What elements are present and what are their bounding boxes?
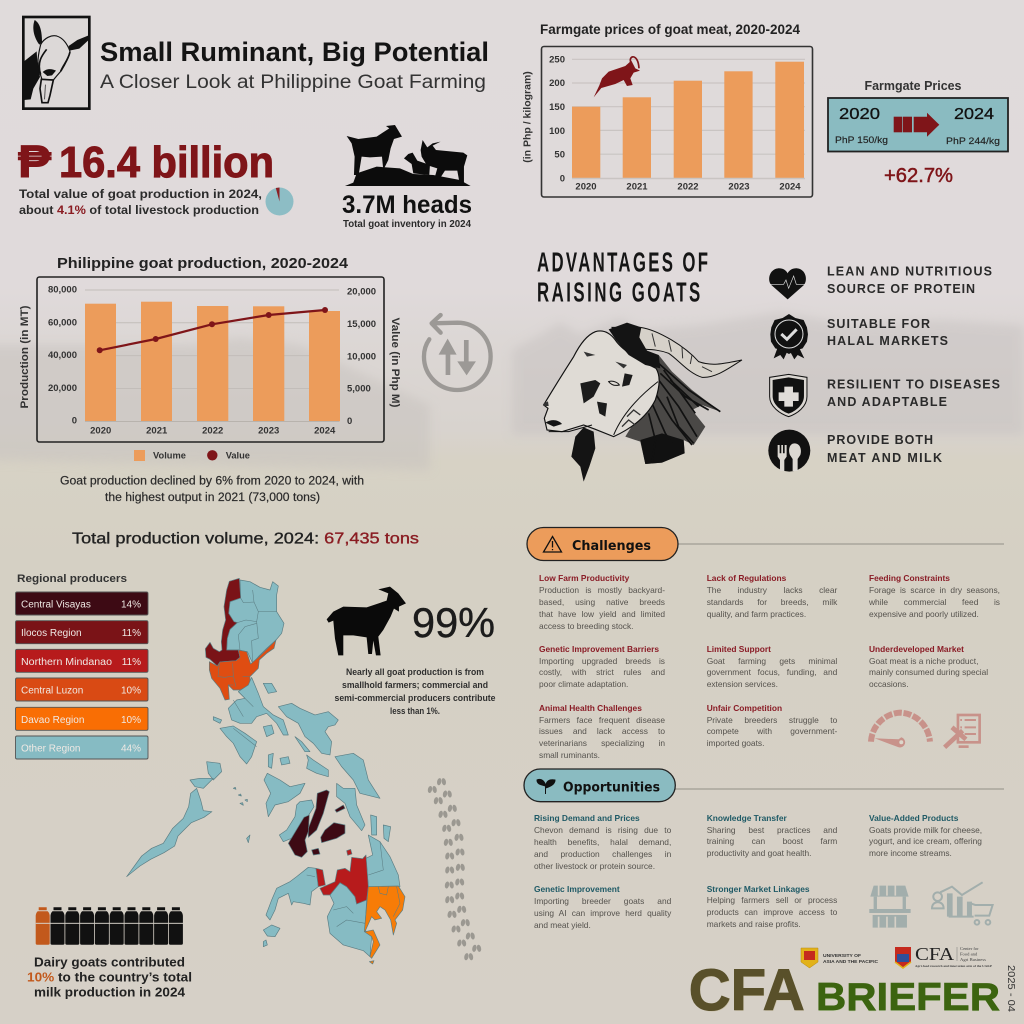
text: Lack of Regulations: [706, 573, 838, 619]
pie: 4.1 percent share: [266, 188, 294, 216]
combo chart: goat production volume and value: 2022: [202, 426, 223, 436]
axis title: production: Production (in MT): [19, 305, 31, 409]
legend: volume and value: Value: [226, 450, 250, 460]
bar chart: farmgate prices: 250: [549, 54, 565, 66]
text: Lack of Regulations: quality, and farm practices.: [707, 609, 806, 619]
icon: goat herd silhouette: [345, 125, 471, 186]
text: meat and milk: PROVIDE BOTH: [827, 433, 933, 447]
legend: regional shares: 44%: [121, 744, 141, 754]
text: Genetic Improvement Barriers: [539, 644, 665, 689]
icon: halal badge with check: [770, 314, 808, 359]
icon: cycle with up and down arrows: [424, 315, 491, 390]
text: smallholder description: [334, 667, 496, 716]
text: dairy goats contribution: 10% to the country’s total: [27, 971, 192, 985]
text: Genetic Improvement: Genetic Improvement: [534, 884, 620, 894]
text: Genetic Improvement Barriers: costly, with strict rules and: [539, 667, 665, 677]
panel: price comparison: PhP 150/kg: [835, 135, 888, 146]
text: Rising Demand and Prices: and production challenges in: [534, 849, 671, 859]
text: Animal Health Challenges: issues and lack access to: [539, 726, 665, 736]
icon: fork and spoon plate: [768, 430, 810, 472]
text: Limited Support: Goat farming gets minimal: [707, 656, 837, 666]
text: Animal Health Challenges: Farmers face frequent disease: [539, 715, 665, 725]
legend: volume and value: Volume: [153, 450, 186, 460]
combo chart: goat production volume and value: [37, 277, 384, 442]
label: inventory caption: Total goat inventory in 2024: [343, 218, 471, 230]
text: Genetic Improvement: Importing breeder goats and: [534, 896, 671, 906]
text: Knowledge Transfer: Sharing best practices and: [707, 825, 837, 835]
text: resilient and adaptable: [827, 378, 1000, 409]
map: Palawan: [127, 778, 250, 877]
icon: shield with cross: [770, 374, 807, 417]
combo chart: goat production volume and value: 40,000: [48, 350, 77, 361]
bar chart: farmgate prices: 2023: [728, 182, 750, 192]
subtitle: A Closer Look at Philippine Goat Farming: [100, 72, 486, 93]
icon: gauge at low level: [871, 713, 930, 747]
text: Rising Demand and Prices: Rising Demand and Prices: [534, 813, 640, 823]
legend: regional shares: Davao Region: [21, 715, 84, 726]
legend: regional shares: 14%: [121, 600, 141, 610]
legend: regional shares: 10%: [121, 686, 141, 696]
logo: University of Asia and the Pacific: ASIA AND THE PACIFIC: [823, 959, 879, 965]
logo: Center for Food and Agri Business: Agri-food research and innovation arm of the UA&P: [915, 964, 993, 968]
wordmark: CFA Briefer: CFA: [689, 958, 805, 1023]
text: Feeding Constraints: while commercial feed is: [869, 597, 1000, 607]
text: Low Farm Productivity: access to breeding stock.: [539, 621, 634, 631]
text: Genetic Improvement: and meat yield.: [534, 920, 591, 930]
text: lean and nutritious: [827, 264, 992, 296]
text: Low Farm Productivity: based, using native breeds: [539, 597, 665, 607]
icon: leaping ibex: [594, 57, 640, 97]
text: value description: about 4.1% of total livestock production: [19, 203, 259, 217]
combo chart: goat production volume and value: 20,000: [48, 383, 77, 394]
text: suitable for halal markets: SUITABLE FOR: [827, 317, 930, 331]
text: Knowledge Transfer: training can boost farm: [707, 836, 837, 846]
text: Stronger Market Linkages: Stronger Market Linkages: [707, 884, 810, 894]
combo chart: goat production volume and value: 2024: [314, 426, 336, 436]
bar chart: farmgate prices: 200: [549, 78, 565, 89]
bar chart: farmgate prices: 2024: [779, 182, 801, 192]
bar chart: farmgate prices: 100: [549, 126, 565, 137]
text: production note: the highest output in 2021 (73,000 tons): [105, 492, 320, 504]
bar chart: farmgate prices: [542, 46, 812, 197]
text: Lack of Regulations: standards for breeds, milk: [707, 597, 837, 607]
combo chart: goat production volume and value: 15,000: [347, 319, 376, 330]
stat: price increase: +62.7%: [884, 165, 953, 187]
text: Low Farm Productivity: Low Farm Productivity: [539, 573, 629, 583]
text: value description: Total value of goat production in 2024,: [19, 187, 262, 201]
text: Value-Added Products: yogurt, and ice cream, offering: [869, 836, 982, 846]
text: Low Farm Productivity: Production is mostly backyard-: [539, 585, 665, 595]
text: Rising Demand and Prices: Chevon demand is rising due to: [534, 825, 671, 835]
label: issue number: 2025 - 04: [1005, 965, 1017, 1012]
text: meat and milk: [827, 433, 942, 465]
text: resilient and adaptable: RESILIENT TO DISEASES: [827, 378, 1000, 392]
legend: regional shares: 10%: [121, 715, 141, 726]
text: Rising Demand and Prices: [534, 813, 671, 871]
text: Unfair Competition: compete with government-: [707, 726, 837, 736]
map: Luzon: [205, 578, 284, 700]
wordmark: CFA Briefer: [689, 958, 1000, 1024]
illustration: goat head with horn: [544, 323, 742, 482]
chart title: goat production: Philippine goat production, 2020-2024: [57, 255, 349, 272]
legend: regional shares: 11%: [122, 628, 141, 639]
bar chart: farmgate prices: 0: [560, 174, 565, 184]
map: southern Luzon, Visayas north: [207, 677, 380, 798]
text: Animal Health Challenges: veterinarians specializing in: [539, 738, 665, 748]
text: smallholder description: semi-commercial producers contribute: [334, 693, 496, 703]
text: Genetic Improvement: [534, 884, 672, 930]
heading: advantages: ADVANTAGES OF: [537, 246, 708, 278]
icon: gavel and clipboard: [945, 715, 980, 747]
icon: sales chart and cart: [932, 882, 993, 925]
legend: regional shares: [16, 592, 148, 759]
logo: University of Asia and the Pacific: UNIVERSITY OF: [823, 953, 861, 959]
heading: advantages: [537, 246, 708, 308]
title: Small Ruminant, Big Potential: [100, 37, 489, 67]
text: Feeding Constraints: Feeding Constraints: [869, 573, 950, 583]
combo chart: goat production volume and value: 60,000: [48, 318, 77, 328]
text: smallholder description: Nearly all goat production is from: [346, 667, 484, 677]
legend: regional shares: Northern Mindanao: [21, 657, 112, 668]
logo: Center for Food and Agri Business: CFA: [915, 944, 954, 964]
text: Underdeveloped Market: Underdeveloped Market: [869, 644, 964, 654]
text: Value-Added Products: Value-Added Products: [869, 813, 958, 823]
logo: Center for Food and Agri Business: Agri Business: [960, 957, 986, 962]
icon: milk bottles, one of ten highlighted: [36, 907, 183, 945]
text: Animal Health Challenges: [539, 703, 665, 760]
text: Feeding Constraints: Forage is scarce in dry seasons,: [869, 585, 1000, 595]
stat: production value: ₱: [18, 136, 52, 187]
panel: price comparison: PhP 244/kg: [946, 136, 1000, 147]
heading: farmgate prices: Farmgate Prices: [864, 79, 962, 93]
logo: goat head in frame: [23, 17, 89, 109]
panel: price comparison: [828, 98, 1008, 152]
heading: advantages: RAISING GOATS: [537, 276, 700, 308]
text: Underdeveloped Market: mainly consumed during special: [869, 667, 988, 677]
text: suitable for halal markets: HALAL MARKETS: [827, 334, 948, 348]
heading pill: opportunities: [524, 769, 1004, 802]
logo: Center for Food and Agri Business: [895, 944, 993, 968]
text: Low Farm Productivity: [539, 573, 665, 631]
bar chart: farmgate prices: 2021: [626, 182, 648, 192]
text: Unfair Competition: Private breeders struggle to: [707, 715, 837, 725]
text: Underdeveloped Market: Goat meat is a niche product,: [869, 656, 978, 666]
combo chart: goat production volume and value: 20,000: [347, 286, 376, 298]
text: value description: [19, 187, 262, 217]
text: Animal Health Challenges: small ruminants.: [539, 750, 600, 760]
combo chart: goat production volume and value: 10,000: [347, 352, 376, 362]
text: Feeding Constraints: [869, 573, 1000, 619]
text: Knowledge Transfer: [706, 813, 837, 858]
combo chart: goat production volume and value: 2021: [146, 426, 168, 436]
icon: standing goat silhouette: [327, 587, 406, 655]
combo chart: goat production volume and value: 5,000: [347, 384, 371, 394]
wordmark: CFA Briefer: BRIEFER: [816, 976, 1000, 1019]
text: Low Farm Productivity: that have low yield and limited: [539, 609, 665, 619]
heading: total production volume: Total production volume, 2024: 67,435 tons: [72, 530, 419, 548]
axis title: price unit: (in Php / kilogram): [522, 71, 534, 163]
text: Lack of Regulations: The industry lacks clear: [707, 585, 837, 595]
text: dairy goats contribution: Dairy goats contributed: [34, 956, 185, 970]
text: smallholder description: smallhold farmers; commercial and: [342, 680, 488, 690]
combo chart: goat production volume and value: 0: [347, 416, 352, 427]
bar chart: farmgate prices: 2020: [575, 182, 597, 192]
text: Limited Support: extension services.: [707, 679, 778, 689]
text: Genetic Improvement Barriers: poor climate adaptation.: [539, 679, 628, 689]
icon: goat hoof print trail: [427, 778, 482, 961]
text: Stronger Market Linkages: [707, 884, 837, 929]
text: dairy goats contribution: milk production in 2024: [34, 986, 185, 1000]
heading pill: opportunities: Opportunities: [563, 781, 660, 796]
text: Animal Health Challenges: Animal Health Challenges: [539, 703, 642, 713]
stat: production value: 16.4 billion: [59, 138, 274, 187]
heading: regional producers: Regional producers: [17, 573, 127, 585]
logo: Center for Food and Agri Business: Center for: [960, 946, 979, 951]
text: Knowledge Transfer: productivity and goat health.: [707, 848, 811, 858]
icon: market stall: [869, 885, 911, 928]
text: Stronger Market Linkages: products can improve access to: [707, 907, 837, 917]
text: Unfair Competition: imported goats.: [707, 738, 764, 748]
combo chart: goat production volume and value: 2020: [90, 426, 111, 436]
combo chart: goat production volume and value: 80,000: [48, 284, 77, 296]
text: Genetic Improvement Barriers: Importing upgraded breeds is: [539, 656, 665, 666]
axis title: value: Value (in Php M): [389, 318, 401, 408]
text: lean and nutritious: LEAN AND NUTRITIOUS: [827, 264, 992, 278]
legend: regional shares: 11%: [122, 657, 141, 668]
legend: regional shares: Ilocos Region: [21, 628, 82, 639]
legend: regional shares: Other Region: [21, 744, 80, 754]
legend: volume and value: [134, 450, 250, 461]
text: suitable for halal markets: [827, 317, 948, 348]
combo chart: goat production volume and value: 0: [72, 416, 77, 426]
text: Limited Support: Limited Support: [707, 644, 771, 654]
text: Unfair Competition: Unfair Competition: [707, 703, 782, 713]
bar chart: farmgate prices: 150: [549, 102, 565, 113]
bar chart: farmgate prices: 50: [554, 150, 565, 160]
logo: Center for Food and Agri Business: Food and: [960, 952, 978, 956]
text: Unfair Competition: [707, 703, 837, 748]
map: Philippines by regional production share: [127, 578, 405, 964]
text: meat and milk: MEAT AND MILK: [827, 451, 942, 465]
text: Underdeveloped Market: occasions.: [869, 679, 909, 689]
heading pill: challenges: [527, 528, 1004, 560]
text: lean and nutritious: SOURCE OF PROTEIN: [827, 282, 975, 296]
panel: price comparison: 2024: [954, 106, 994, 123]
chart title: farmgate prices: Farmgate prices of goat meat, 2020-2024: [540, 22, 800, 37]
text: Genetic Improvement Barriers: Genetic Improvement Barriers: [539, 644, 659, 654]
text: Value-Added Products: more income streams.: [869, 848, 952, 858]
bar chart: farmgate prices: 2022: [677, 182, 699, 192]
wordmark: CFA Briefer: CFA: [690, 959, 806, 1024]
legend: regional shares: Central Luzon: [21, 686, 83, 696]
icon: heart with pulse: [769, 268, 806, 299]
stat: smallholder share: 99%: [412, 599, 495, 646]
combo chart: goat production volume and value: 2023: [258, 426, 279, 436]
text: Rising Demand and Prices: health benefits, halal demand,: [534, 837, 671, 847]
logo: University of Asia and the Pacific: [801, 948, 879, 968]
text: Value-Added Products: Goats provide milk for cheese,: [869, 825, 982, 835]
wordmark: CFA Briefer: BRIEFER: [816, 977, 1000, 1020]
text: Feeding Constraints: expensive and poorly utilized.: [869, 609, 979, 619]
text: Limited Support: government focus, funding, and: [707, 667, 837, 677]
text: production note: [60, 476, 364, 504]
text: Knowledge Transfer: Knowledge Transfer: [707, 813, 787, 823]
text: Limited Support: [707, 644, 837, 689]
legend: regional shares: Central Visayas: [21, 600, 91, 610]
text: production note: Goat production declined by 6% from 2020 to 2024, with: [60, 476, 364, 488]
text: smallholder description: less than 1%.: [390, 706, 440, 716]
text: Rising Demand and Prices: other livestock or protein source.: [534, 861, 655, 871]
text: Stronger Market Linkages: markets and raise profits.: [707, 919, 801, 929]
text: resilient and adaptable: AND ADAPTABLE: [827, 395, 947, 409]
heading pill: challenges: Challenges: [572, 539, 651, 554]
text: dairy goats contribution: [27, 956, 192, 1000]
map: Visayas and Mindanao: [263, 773, 405, 964]
stat: goat inventory: 3.7M heads: [342, 191, 472, 219]
panel: price comparison: 2020: [839, 106, 880, 123]
text: Stronger Market Linkages: Helping farmers sell or process: [707, 895, 837, 905]
text: Lack of Regulations: Lack of Regulations: [707, 573, 786, 583]
text: Underdeveloped Market: [869, 644, 988, 689]
text: Genetic Improvement: using AI can improve herd quality: [534, 908, 671, 918]
text: Value-Added Products: [869, 813, 982, 858]
